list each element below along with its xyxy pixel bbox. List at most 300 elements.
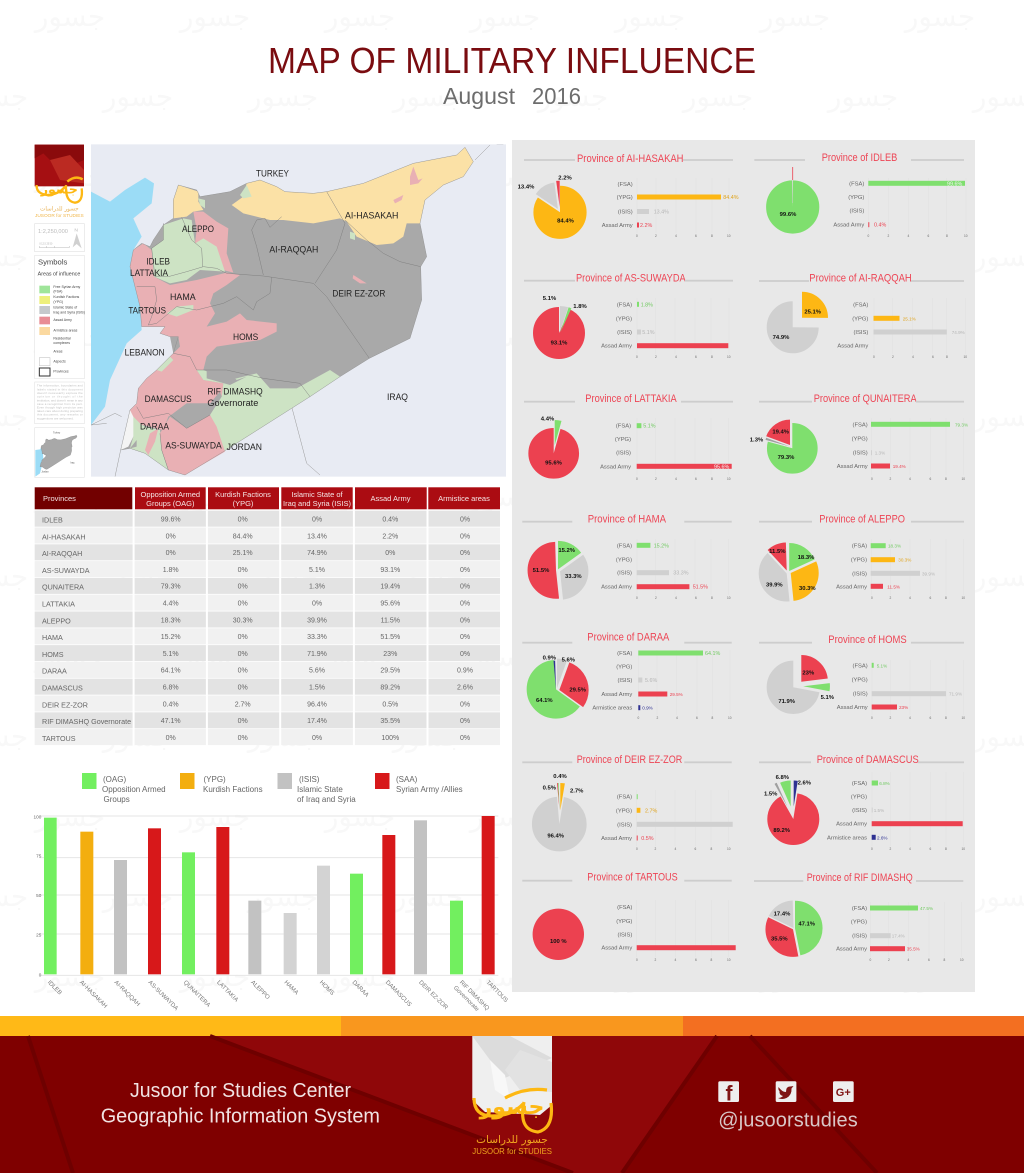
scale box: N — [74, 228, 78, 234]
legend: symbols: Residential — [53, 337, 71, 341]
table row: AI-HASAKAH: 13.4% — [307, 533, 327, 540]
table row: DEIR EZ-ZOR: 0.5% — [382, 701, 398, 708]
disclaimer note: this document, any remarks or — [37, 413, 83, 417]
icon: facebook — [718, 1081, 739, 1106]
bar chart: Assad Army — [601, 585, 632, 591]
pie chart: 84.4% — [557, 218, 575, 224]
bar chart: 0246810 — [871, 596, 965, 600]
pie chart — [750, 430, 805, 461]
pie chart: 39.9% — [766, 582, 783, 588]
territory: opposition north-west — [152, 218, 225, 283]
disclaimer note: opinion or thought of the — [37, 395, 83, 399]
bar chart: (FSA) — [853, 302, 868, 308]
table row: AI-RAQQAH — [42, 549, 470, 558]
disclaimer note — [35, 382, 84, 424]
bar chart: Assad Army — [837, 464, 868, 470]
heading: Province of IDLEB — [822, 152, 897, 164]
bar chart — [837, 418, 968, 481]
table row: DEIR EZ-ZOR — [42, 700, 470, 709]
table row: HOMS: 0% — [460, 651, 470, 658]
table row: DAMASCUS: 89.2% — [380, 684, 400, 692]
bar chart — [601, 298, 731, 359]
province boundaries — [137, 192, 421, 470]
pie chart: 25.1% — [804, 310, 822, 316]
territory: opposition south-east — [197, 370, 340, 452]
table row: TARTOUS: 0% — [460, 735, 470, 742]
inset location map: Jordan — [41, 471, 49, 474]
heading: Province of AS-SUWAYDA — [576, 272, 687, 284]
logo: Jusoor top-left: جسور — [40, 181, 78, 196]
bar chart — [601, 539, 731, 600]
bar chart: (YPG) — [615, 437, 631, 443]
bar chart: Assad Army — [601, 946, 632, 952]
panel: Province of AL-RAQQAH — [759, 272, 967, 359]
table row: DAMASCUS: 2.6% — [457, 684, 473, 692]
pie chart — [541, 416, 567, 466]
pie chart: 6.8% — [776, 775, 790, 781]
panel: Province of IDLEB — [754, 152, 968, 238]
table row: LATTAKIA: 0% — [312, 600, 322, 608]
table row: QUNAITERA: 19.4% — [380, 584, 400, 591]
bar chart: 84.4% — [723, 195, 739, 201]
table row: DEIR EZ-ZOR: 2.7% — [235, 701, 251, 708]
bar chart province labels: QUNAITERA — [182, 980, 211, 1009]
bar chart: 51.5% — [693, 585, 708, 591]
bar chart: (FSA) — [849, 181, 864, 187]
table row: QUNAITERA — [42, 583, 470, 592]
pie chart: 35.5% — [771, 936, 788, 942]
table row: DARAA: DARAA — [42, 667, 67, 676]
pie chart — [764, 775, 812, 834]
map labels: Governorate — [207, 398, 258, 408]
bar chart: (ISIS) — [853, 692, 868, 698]
bar chart: 39.9% — [922, 571, 935, 576]
title: MAP OF MILITARY INFLUENCE — [268, 40, 756, 81]
table row: TARTOUS: 0% — [312, 735, 322, 742]
bar chart: 64.1% — [705, 651, 720, 657]
heading: Province of HOMS — [828, 634, 907, 646]
legend: bar chart colours: Groups — [104, 795, 130, 804]
heading: Province of ALEPPO — [819, 514, 905, 526]
bar chart: 13.4% — [654, 210, 669, 216]
inset location map: Iraq — [70, 461, 75, 464]
legend: symbols: Aspects — [53, 360, 66, 364]
table row: IDLEB — [42, 516, 470, 524]
legend: bar chart colours: (YPG) — [204, 775, 226, 784]
table row: HAMA — [42, 633, 470, 642]
pie chart — [533, 548, 582, 586]
heading: Province of DAMASCUS — [817, 754, 919, 766]
pie chart: 47.1% — [798, 922, 816, 928]
table row: HAMA: HAMA — [42, 633, 63, 642]
territory: opposition small pockets — [167, 305, 193, 317]
panel: Province of HAMA — [522, 514, 732, 600]
heading: Province of AI-RAQQAH — [809, 272, 912, 284]
bar chart province labels: AS-SUWAYDA — [147, 980, 179, 1012]
table row: LATTAKIA: 0% — [460, 600, 470, 608]
bar chart: 0246810 — [870, 958, 964, 962]
legend: bar chart colours: Opposition Armed — [102, 785, 166, 794]
bar chart: 0.9% — [642, 706, 653, 711]
table row: DAMASCUS: 6.8% — [163, 684, 179, 692]
pie chart: 51.5% — [533, 568, 550, 574]
disclaimer note: case a recognition from its part. — [37, 402, 83, 406]
table row: DEIR EZ-ZOR: 0% — [460, 701, 470, 708]
panel: Province of AL-HASAKAH — [518, 153, 739, 238]
bar chart: Armistice areas — [827, 835, 867, 841]
map labels: IDLEB — [146, 257, 170, 267]
map labels: JORDAN — [227, 442, 262, 452]
bar chart: (FSA) — [617, 795, 632, 801]
bar chart province labels: DARAA — [351, 980, 369, 999]
bar chart: (YPG) — [616, 808, 632, 814]
map labels: AI-RAQQAH — [269, 245, 318, 255]
disclaimer note: taken care about during preparing — [37, 409, 83, 413]
bar chart: (YPG) — [851, 558, 867, 564]
disclaimer note: The information, boundaries and — [37, 384, 83, 388]
pie chart: 74.9% — [773, 335, 790, 341]
bar chart: (YPG) — [617, 195, 633, 201]
panel: map legend sidebar — [35, 145, 85, 477]
table row: AI-HASAKAH: 0% — [166, 533, 176, 540]
bar chart: 0246810 — [868, 234, 968, 238]
pie chart: 29.5% — [569, 688, 587, 694]
table header: Provinces — [43, 494, 76, 503]
bar chart: 19.4% — [893, 464, 906, 469]
legend: bar chart colours: Syrian Army /Allies — [396, 785, 463, 794]
table header: Opposition Armed — [140, 490, 200, 499]
table row: AS-SUWAYDA: 93.1% — [380, 567, 400, 574]
bar chart: Assad Army — [601, 836, 632, 842]
bar chart: (YPG) — [616, 664, 632, 670]
pie chart: 89.2% — [773, 828, 791, 834]
legend: symbols: Symbols — [38, 258, 68, 267]
subtitle: date: 2016 — [532, 83, 581, 109]
table row: RIF DIMASHQ — [42, 717, 470, 726]
territory: Assad south — [130, 353, 223, 430]
pie chart: 71.9% — [778, 699, 796, 705]
legend: symbols: Iraq and Syria (ISIS) — [53, 311, 85, 315]
table row: AI-RAQQAH: 0% — [385, 550, 395, 557]
table row: HAMA: 0% — [238, 634, 248, 641]
panel: map of Syria — [91, 144, 506, 477]
pie chart: 5.1% — [821, 695, 835, 701]
bar chart: 2.2% — [640, 223, 652, 229]
bar chart: 74.9% — [952, 330, 965, 335]
bar chart: (ISIS) — [853, 451, 868, 457]
table row: TARTOUS: 0% — [238, 735, 248, 742]
table row: DAMASCUS: 0% — [238, 684, 248, 692]
bar chart: (YPG) — [851, 795, 867, 801]
heading: Province of DEIR EZ-ZOR — [577, 754, 683, 766]
bar chart province labels: TARTOUS — [485, 980, 509, 1004]
bar chart: 0246810 — [871, 847, 965, 851]
bar chart — [837, 660, 965, 720]
territory: Assad enclaves north-east — [353, 167, 423, 283]
bar chart: (ISIS) — [617, 571, 632, 577]
bar chart: (FSA) — [617, 905, 632, 911]
table row: DAMASCUS — [42, 684, 473, 692]
territory: green Aleppo pockets — [350, 232, 355, 240]
bar chart province labels: DAMASCUS — [384, 980, 412, 1008]
bar chart — [836, 902, 964, 962]
table row: AS-SUWAYDA: AS-SUWAYDA — [42, 566, 90, 575]
panel: Province of TARTOUS — [522, 871, 736, 962]
map labels: AS-SUWAYDA — [165, 441, 222, 451]
legend: symbols: Free Syrian Army — [53, 285, 81, 289]
legend: symbols: Kurdish Factions — [53, 295, 80, 299]
bar chart: 23% — [899, 705, 908, 710]
table row: ALEPPO: ALEPPO — [42, 616, 71, 625]
map labels: AI-HASAKAH — [345, 211, 398, 221]
legend: symbols: Armistice areas — [53, 329, 78, 333]
bar chart — [601, 900, 736, 962]
inset location map — [35, 428, 84, 477]
panel: Province of RIF DIMASHQ — [754, 872, 964, 962]
table row: DEIR EZ-ZOR: 0.4% — [163, 701, 179, 708]
bar chart: (ISIS) — [853, 330, 868, 336]
table header: Armistice areas — [438, 494, 490, 503]
bar chart: 71.9% — [949, 692, 962, 697]
bar chart: (YPG) — [852, 316, 868, 322]
territory: Kurdish Afrin — [173, 185, 203, 218]
table: provinces influence percentages — [35, 487, 500, 746]
table row: AI-HASAKAH: 2.2% — [382, 533, 398, 540]
bar chart: Assad Army — [837, 705, 868, 711]
bar chart: (YPG) — [852, 437, 868, 443]
table row: AI-RAQQAH: 74.9% — [307, 550, 327, 557]
bar chart: (ISIS) — [852, 934, 867, 940]
bar chart: Assad Army — [601, 344, 632, 350]
bar chart province labels: AI-HASAKAH — [78, 980, 108, 1010]
table row: HAMA: 33.3% — [307, 634, 327, 641]
table row: AI-HASAKAH: 0% — [460, 533, 470, 540]
bar chart: (ISIS) — [852, 808, 867, 814]
bar chart: 11.5% — [887, 584, 900, 589]
legend: symbols: complexes — [53, 341, 70, 345]
scale box — [35, 224, 84, 252]
pie chart — [536, 656, 587, 705]
bar chart: 0246810 — [873, 355, 967, 359]
map labels: ALEPPO — [182, 224, 214, 234]
bar chart: 0246810 — [636, 234, 731, 238]
table row: RIF DIMASHQ: 17.4% — [307, 718, 327, 725]
footer logo — [472, 1036, 552, 1156]
panel: Province of HOMS — [759, 634, 965, 720]
bar chart: Assad Army — [836, 947, 867, 953]
disclaimer note: doesn't necessarily express the — [37, 391, 83, 395]
pie chart: 19.4% — [772, 430, 790, 436]
disclaimer note: Even though high precision was — [37, 406, 83, 410]
map labels: DARAA — [140, 421, 169, 431]
pie chart — [518, 176, 575, 226]
bar chart: 15.2% — [654, 543, 669, 549]
disclaimer note: institution, and doesn't mean in any — [37, 398, 83, 402]
pie chart — [543, 296, 587, 346]
table row: AI-HASAKAH: 84.4% — [233, 533, 253, 540]
footer text: organisation: Geographic Information System — [101, 1105, 380, 1128]
pie chart: 93.1% — [551, 340, 568, 346]
bar chart: 33.3% — [673, 571, 689, 577]
pie chart: 23% — [802, 670, 815, 676]
pie chart: 18.3% — [798, 555, 815, 561]
pie chart: 1.8% — [573, 304, 587, 310]
map labels: HOMS — [233, 332, 258, 342]
table row: RIF DIMASHQ: 0% — [238, 718, 248, 725]
pie chart — [779, 167, 806, 220]
bar chart: (ISIS) — [618, 210, 633, 216]
bar chart: 0246810 — [636, 477, 731, 481]
legend: bar chart colours: (SAA) — [396, 775, 418, 784]
table rows background — [35, 510, 500, 746]
map labels: RIF DIMASHQ — [207, 386, 263, 396]
panel: Province of ALEPPO — [759, 514, 965, 600]
table row: LATTAKIA — [42, 600, 470, 608]
icon: facebook: f — [726, 1082, 734, 1106]
territory: Assad Suwayda — [160, 415, 225, 475]
table header: Iraq and Syria (ISIS) — [283, 499, 351, 508]
disclaimer note: suggestions are welcomed. — [37, 416, 74, 420]
bar chart: 47.5% — [920, 906, 933, 911]
table row: DARAA: 5.6% — [309, 668, 325, 675]
bar chart: 1.8% — [641, 302, 653, 308]
map labels: DAMASCUS — [145, 394, 192, 404]
table row: DARAA: 64.1% — [161, 668, 181, 675]
map labels: DEIR EZ-ZOR — [332, 289, 386, 299]
bar chart: 0246810 — [636, 958, 731, 962]
bar chart: Assad Army — [600, 464, 631, 470]
pie chart: 2.2% — [558, 176, 572, 182]
bar chart — [837, 298, 967, 359]
map labels: IRAQ — [387, 392, 408, 402]
bar chart: 30.3% — [898, 558, 911, 563]
pie chart: 99.6% — [780, 212, 797, 218]
disclaimer note: labels stated in this document — [37, 387, 83, 391]
footer text: organisation: Jusoor for Studies Center — [130, 1079, 351, 1102]
pie chart: 0.9% — [543, 656, 557, 662]
pie chart — [771, 912, 816, 943]
bar chart: (ISIS) — [852, 571, 867, 577]
legend: symbols: Islamic State of — [53, 306, 77, 310]
bar chart: 6.8% — [879, 781, 890, 786]
bar chart: (ISIS) — [849, 209, 864, 215]
legend: bar chart colours: Islamic State — [297, 785, 343, 794]
pie chart: 1.3% — [750, 438, 764, 444]
bar chart: 25.1% — [903, 316, 916, 321]
bar chart: 1.5% — [874, 808, 884, 813]
bar chart — [601, 790, 733, 851]
table row: QUNAITERA: QUNAITERA — [42, 583, 84, 592]
bar chart: dominant force per province: 50 — [36, 893, 42, 898]
pie chart: 17.4% — [774, 912, 791, 918]
legend: symbols: Areas of influence — [38, 272, 80, 278]
pie chart: 100 % — [550, 939, 567, 945]
bar chart: (ISIS) — [617, 678, 632, 684]
territory: Kurdish north-east — [232, 147, 473, 245]
table row: LATTAKIA: LATTAKIA — [42, 600, 75, 608]
bar chart: (YPG) — [851, 920, 867, 926]
table row: DARAA — [42, 667, 473, 676]
bar chart: 5.1% — [877, 663, 887, 668]
heading: Province of HAMA — [588, 514, 667, 526]
bar chart province labels: RIF DIMASHQ — [458, 980, 490, 1012]
bar chart: 1.3% — [875, 451, 885, 456]
legend: symbols: Assad Army — [53, 318, 72, 322]
legend: bar chart colours — [82, 773, 463, 804]
bar chart: 0246810 — [871, 477, 965, 481]
table row: IDLEB: 0% — [238, 516, 248, 524]
bar chart — [827, 772, 965, 851]
table row: RIF DIMASHQ: 0% — [460, 718, 470, 725]
map labels: HAMA — [170, 292, 196, 302]
heading: Province of RIF DIMASHQ — [807, 872, 913, 884]
footer logo: جسور للدراسات — [476, 1134, 548, 1146]
bar chart: dominant force per province: 100 — [34, 814, 42, 819]
table header: Groups (OAG) — [146, 499, 195, 508]
panel: Province of DEIR EZ-ZOR — [522, 754, 733, 851]
scale box: 0 12.5 25 50 — [39, 243, 53, 245]
pie chart: 0.5% — [543, 786, 557, 792]
table row: RIF DIMASHQ: 47.1% — [161, 718, 181, 725]
bar chart province labels: HOMS — [318, 980, 335, 997]
bar chart: 0246810 — [638, 716, 732, 720]
table row: ALEPPO: 18.3% — [161, 617, 181, 624]
bar chart: (FSA) — [617, 651, 632, 657]
legend: symbols: Areas — [53, 350, 63, 354]
bar chart: 35.5% — [907, 947, 920, 952]
territory: ISIS base — [121, 184, 426, 450]
table row: HOMS — [42, 650, 470, 659]
pie chart — [543, 774, 584, 840]
table row: HOMS: 23% — [383, 651, 397, 658]
bar chart: Assad Army — [836, 584, 867, 590]
footer band — [0, 1036, 1024, 1173]
pie chart: 64.1% — [536, 698, 553, 704]
territory: Assad Aleppo — [193, 212, 233, 273]
sea — [91, 178, 154, 425]
pie chart: 79.3% — [778, 455, 795, 461]
bar chart: (ISIS) — [617, 822, 632, 828]
pie chart: 30.3% — [799, 586, 816, 592]
bar chart: Armistice areas — [592, 706, 632, 712]
table row: AI-RAQQAH: 0% — [460, 550, 470, 557]
logo: Jusoor top-left: جسور للدراسات — [40, 207, 79, 213]
heading: Province of TARTOUS — [587, 871, 678, 883]
pie chart: 2.6% — [798, 780, 812, 786]
table row: AI-HASAKAH — [42, 532, 470, 541]
table header: (YPG) — [233, 499, 254, 508]
bar chart — [602, 178, 739, 238]
heading: Province of DARAA — [587, 632, 670, 644]
table row: AI-RAQQAH: 0% — [166, 550, 176, 557]
heading: Province of QUNAITERA — [814, 393, 918, 405]
bar chart: (FSA) — [852, 544, 867, 550]
pie chart: 1.5% — [764, 792, 778, 798]
table row: QUNAITERA: 0% — [460, 584, 470, 591]
heading: Province of AI-HASAKAH — [577, 153, 684, 165]
bar chart: 79.3% — [955, 422, 968, 427]
bar chart: 0.4% — [874, 223, 886, 229]
table row: HOMS: 0% — [238, 651, 248, 658]
map labels: LEBANON — [125, 347, 165, 357]
map labels — [125, 169, 408, 452]
table row: DARAA: 0% — [238, 668, 248, 675]
table row: RIF DIMASHQ: 35.5% — [380, 718, 400, 725]
legend: symbols: Provinces — [53, 370, 69, 374]
table header — [35, 487, 500, 509]
bar chart — [600, 418, 732, 481]
panel: provinces charts background — [512, 140, 975, 992]
